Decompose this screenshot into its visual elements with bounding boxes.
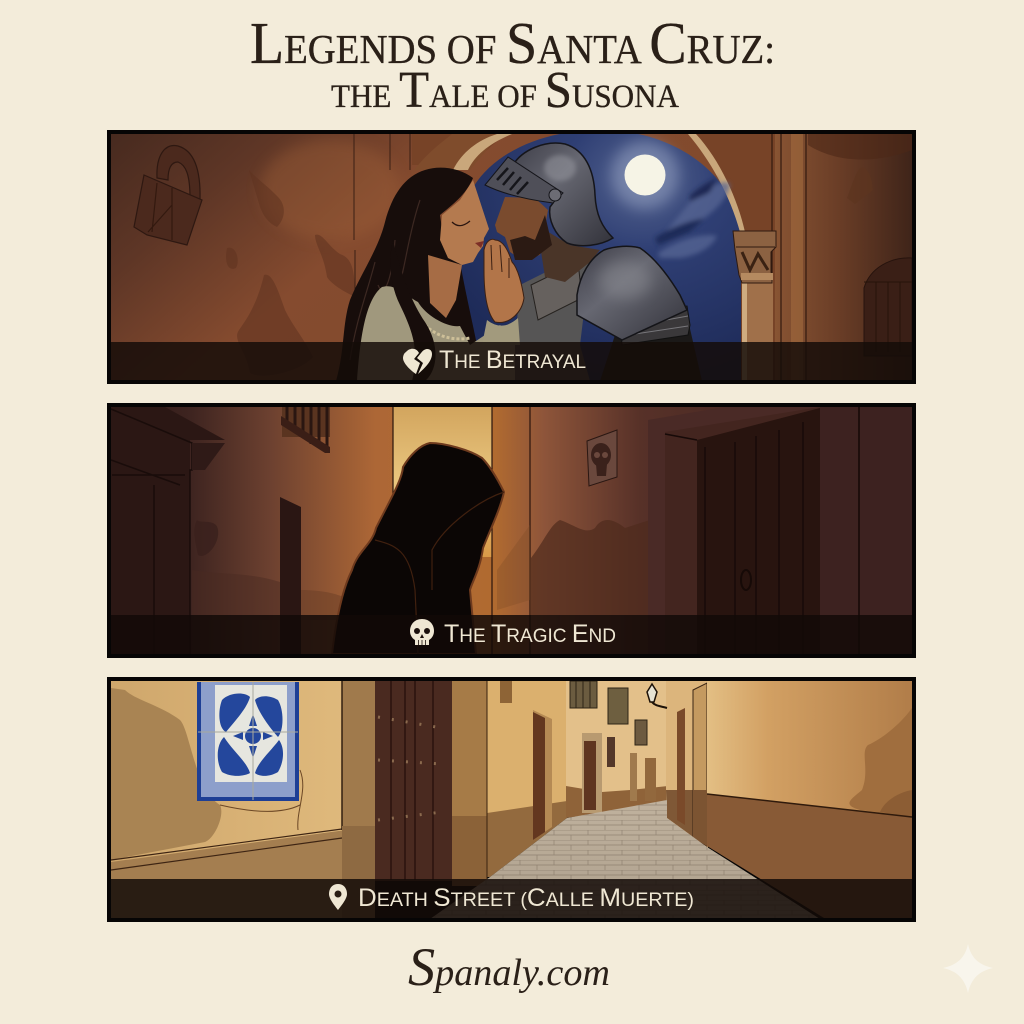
light opening — [393, 407, 492, 557]
knight — [482, 143, 702, 381]
woman dress — [357, 286, 520, 381]
mid door — [582, 733, 602, 813]
caption text: DEATH STREET (CALLE MUERTE) — [358, 884, 694, 912]
footer brand: Spanaly.com — [408, 937, 610, 997]
barred window — [281, 407, 330, 453]
sleeve — [482, 318, 520, 345]
left wainscot — [111, 830, 346, 918]
right wall damage — [849, 708, 912, 817]
balcony — [570, 681, 597, 708]
caption text: THE BETRAYAL — [439, 346, 586, 374]
title line 2: THE TALE OF SUSONA — [331, 62, 679, 119]
knight chest armour — [515, 262, 590, 381]
mid window — [607, 737, 615, 767]
tile panel — [197, 682, 299, 801]
caption: the tragic end — [410, 619, 616, 648]
woman — [336, 168, 520, 381]
right wainscot — [707, 794, 912, 918]
pillar and wall — [452, 681, 487, 816]
studded door — [375, 681, 452, 881]
woman hand — [484, 239, 524, 322]
icon: sparkle — [943, 944, 993, 993]
knight lames — [620, 306, 690, 345]
knight beard — [510, 215, 552, 260]
caption bar — [111, 879, 912, 918]
night sky — [460, 130, 741, 380]
icon: broken heart — [403, 349, 432, 374]
caption: death street — [329, 884, 694, 912]
knight pauldron — [577, 246, 687, 340]
panel: the tragic end — [107, 403, 916, 658]
far doors — [630, 753, 637, 801]
panel: the betrayal — [107, 130, 916, 384]
woman neck — [428, 255, 462, 318]
right wall — [707, 681, 912, 817]
woman hair — [336, 168, 480, 381]
street lamp — [647, 684, 667, 708]
woman face — [440, 180, 489, 265]
knight face — [495, 197, 548, 260]
column — [342, 681, 375, 828]
alley wall — [165, 407, 724, 654]
column capital — [733, 231, 776, 380]
knight coif — [540, 230, 600, 282]
title line 1: LEGENDS OF SANTA CRUZ: — [250, 10, 775, 76]
cobbled road — [430, 800, 820, 919]
panel: death street — [107, 677, 916, 922]
wall stains — [226, 180, 354, 342]
right wall — [820, 407, 912, 654]
wall left — [111, 134, 722, 380]
caption bar — [111, 342, 912, 380]
knight helmet — [513, 143, 613, 246]
woman foreground hair — [390, 240, 436, 381]
title — [250, 10, 775, 119]
damaged plaster — [531, 520, 650, 615]
caption bar — [111, 615, 912, 654]
hooded figure — [332, 443, 504, 654]
crack and wear left — [200, 522, 218, 556]
knight arm — [600, 328, 702, 380]
caption text: THE TRAGIC END — [444, 620, 616, 648]
arch trim — [453, 134, 745, 232]
dark window — [864, 258, 912, 356]
clouds — [655, 178, 730, 258]
mid buildings — [566, 681, 668, 806]
right doorway — [648, 407, 830, 654]
caption: the betrayal — [403, 346, 586, 374]
icon: padlock lantern — [134, 146, 202, 245]
small door — [280, 497, 301, 654]
icon: map pin — [329, 884, 347, 910]
left wall — [111, 681, 346, 871]
moon — [611, 141, 679, 209]
left doorway — [111, 407, 225, 615]
arch masonry — [412, 134, 775, 342]
door left alley — [533, 710, 552, 840]
pillar lines — [354, 134, 410, 300]
right alley wall — [666, 681, 708, 851]
skull plaque — [587, 430, 617, 486]
icon: skull — [410, 619, 434, 645]
wall right — [775, 134, 912, 380]
